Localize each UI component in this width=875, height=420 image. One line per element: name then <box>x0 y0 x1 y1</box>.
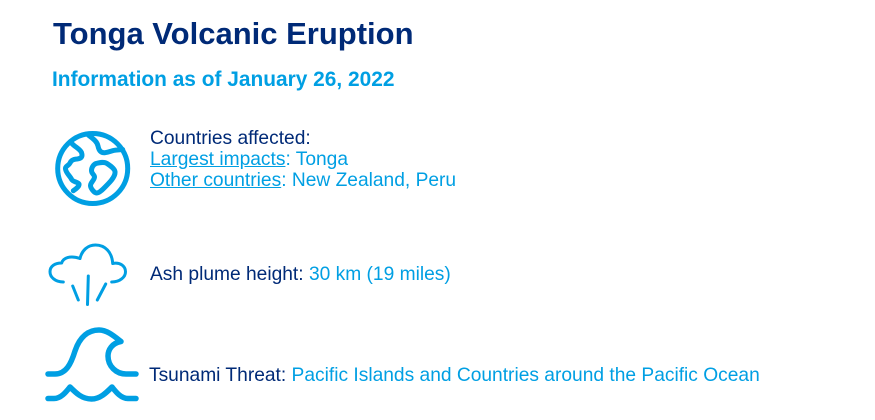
subtitle: Information as of January 26, 2022 <box>52 68 395 91</box>
text: ash plume height: Ash plume height: 30 km (19 miles) <box>150 264 451 284</box>
text: countries affected <box>150 128 456 190</box>
title: Tonga Volcanic Eruption <box>53 16 414 51</box>
text: tsunami threat: Tsunami Threat: Pacific Islands and Countries around the Pacific Ocean <box>149 364 760 386</box>
text: countries affected: Other countries: New Zealand, Peru <box>150 170 456 190</box>
text: countries affected: Largest impacts: Tonga <box>150 148 348 170</box>
text: countries affected: Countries affected: <box>150 128 311 148</box>
